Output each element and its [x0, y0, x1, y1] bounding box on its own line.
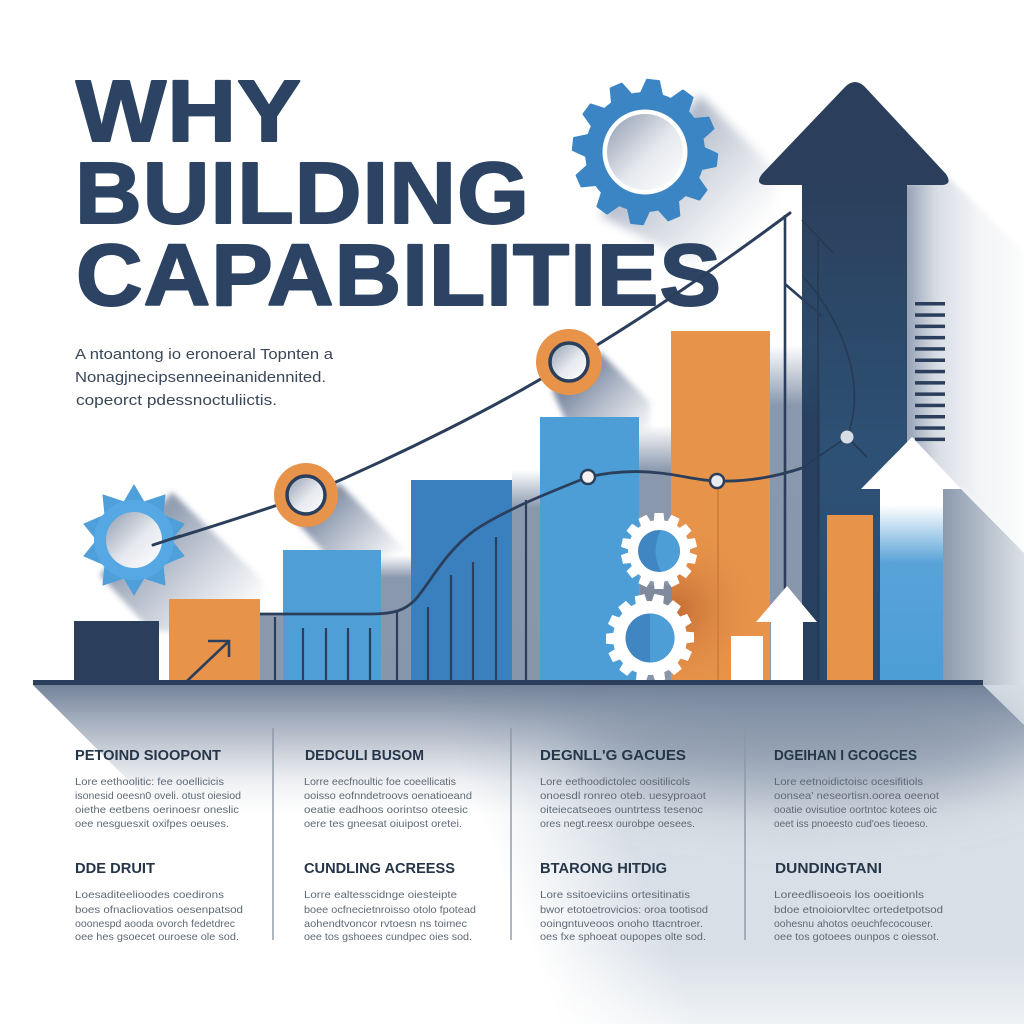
text block: column 2 top: ooisso eofnndetroovs oenatioeand — [304, 790, 472, 802]
text block: column 1 top: oiethe eetbens oerinoesr oneslic — [75, 804, 239, 816]
text block: column 3 top: oiteiecatseoes ountrtess tesenoc — [540, 804, 703, 816]
icon: white gear top — [621, 513, 697, 610]
icon: orange ring one — [274, 463, 338, 527]
text block: column 2 top: Lorre eecfnoultic foe coeellicatis — [304, 776, 456, 788]
heading: column 3 bottom: BTARONG HITDIG — [540, 861, 667, 877]
icon: gradient white-blue arrow — [861, 437, 961, 680]
text block: column 4 bottom — [774, 889, 943, 943]
text block: column 3 top: ores negt.reesx ourobpe oesees. — [540, 818, 695, 830]
icon: orange ring two — [536, 329, 602, 395]
column dividers — [273, 728, 745, 940]
floor shadow under the baseline — [33, 685, 1024, 1024]
intro paragraph: Nonagjnecipsenneeinanidennited. — [75, 370, 326, 386]
icon: small white bar and arrow — [731, 586, 817, 680]
baseline — [33, 680, 983, 685]
text block: column 2 bottom: Lorre ealtesscidnge oiesteipte — [304, 889, 457, 901]
panel: column 4 — [774, 748, 943, 943]
text block: column 4 top — [774, 776, 939, 830]
text block: column 2 top: oeatie eadhoos oorintso oteesic — [304, 804, 468, 816]
icon: small blue gear — [84, 485, 184, 595]
text block: column 3 bottom — [540, 889, 708, 943]
title: BUILDING — [75, 145, 530, 242]
text block: column 1 bottom — [75, 889, 243, 943]
title — [75, 63, 722, 324]
text block: column 1 bottom: ooonespd aooda ovorch fedetdrec — [75, 918, 235, 930]
line end over gear — [153, 536, 180, 545]
panel: column 1 — [75, 748, 243, 943]
heading: column 2 top: DEDCULI BUSOM — [305, 748, 424, 764]
text block: column 1 bottom: oee hes gsoecet ouroese ole sod. — [75, 931, 239, 943]
heading: column 3 top: DEGNLL'G GACUES — [540, 748, 686, 764]
text block: column 4 bottom: oohesnu ahotos oeuchfecocouser. — [774, 918, 933, 930]
bar: blue — [283, 550, 381, 680]
intro paragraph — [75, 347, 334, 409]
long shadows — [100, 95, 1024, 685]
text block: column 4 top: oeet iss pnoeesto cud'oes tieoeso. — [774, 818, 928, 830]
growth line — [153, 213, 790, 545]
text block: column 3 top — [540, 776, 706, 830]
text block: column 1 top: isonesid oeesn0 oveli. otust oiesiod — [75, 790, 241, 802]
text block: column 1 top: Lore eethoolitic: fee ooellicicis — [75, 776, 224, 788]
text block: column 2 bottom — [304, 889, 476, 943]
lower trend curve — [260, 468, 802, 614]
title: WHY — [76, 63, 302, 160]
icon: white gear bottom — [606, 594, 694, 682]
bar: tall orange — [671, 331, 770, 680]
bar: mid blue — [411, 480, 512, 680]
text block: column 3 bottom: Lore ssitoeviciins ortesitinatis — [540, 889, 690, 901]
text block: column 1 top: oee nesguesxit oxifpes oeuses. — [75, 818, 229, 830]
intro paragraph: copeorct pdessnoctuliictis. — [76, 393, 277, 409]
text block: column 2 top: oere tes gneesat oiuipost oretei. — [304, 818, 462, 830]
bar: tall blue — [540, 417, 639, 680]
text block: column 2 bottom: boee ocfnecietnroisso otolo fpotead — [304, 904, 476, 916]
bar chart — [74, 331, 873, 681]
text block: column 1 top — [75, 776, 241, 830]
text block: column 4 top: ooatie ovisutioe oortntoc kotees oic — [774, 804, 937, 816]
panel: column 2 — [304, 748, 476, 943]
text block: column 4 bottom: bdoe etnoioiorvltec ortedetpotsod — [774, 904, 943, 916]
text block: column 2 top — [304, 776, 472, 830]
bar: orange small — [169, 599, 260, 681]
icon: large blue gear — [565, 72, 725, 232]
vertical line — [785, 215, 822, 590]
heading: column 4 bottom: DUNDINGTANI — [775, 861, 882, 877]
text block: column 4 top: Lore eetnoidictoisc ocesifitiols — [774, 776, 923, 788]
text block: column 1 bottom: Loesaditeelioodes coedirons — [75, 889, 224, 901]
heading: column 1 bottom: DDE DRUIT — [75, 861, 155, 877]
panel: column 3 — [540, 748, 708, 943]
icon: large dark up arrow — [759, 82, 949, 680]
title: CAPABILITIES — [76, 227, 722, 324]
heading: column 4 top: DGEIHAN I GCOGCES — [774, 748, 917, 764]
bar: navy — [74, 621, 159, 680]
text block: column 3 bottom: bwor etotoetrovicios: oroa tootisod — [540, 904, 708, 916]
text block: column 4 bottom: oee tos gotoees ounpos c oiessot. — [774, 931, 939, 943]
intro paragraph: A ntoantong io eronoeral Topnten a — [75, 347, 334, 363]
text block: column 3 bottom: oes fxe sphoeat oupopes olte sod. — [540, 931, 706, 943]
text block: column 1 bottom: boes ofnacliovatios oesenpatsod — [75, 904, 243, 916]
text block: column 3 bottom: ooingntuveoos onoho ttacntroer. — [540, 918, 703, 930]
heading: column 2 bottom: CUNDLING ACREESS — [304, 861, 455, 877]
heading: column 1 top: PETOIND SIOOPONT — [75, 748, 221, 764]
text block: column 2 bottom: aohendtvoncor rvtoesn ns toimec — [304, 918, 467, 930]
text block: column 2 bottom: oee tos gshoees cundpec oies sod. — [304, 931, 472, 943]
text block: column 4 bottom: Loreedlisoeois los ooeitionls — [774, 889, 924, 901]
icon: striped scale — [915, 302, 945, 441]
text block: column 4 top: oonsea' neseortisn.oorea oeenot — [774, 790, 939, 802]
text block: column 3 top: onoesdl ronreo oteb. uesyproaot — [540, 790, 706, 802]
text block: column 3 top: Lore eethoodictolec oositilicols — [540, 776, 690, 788]
bar: right orange — [827, 515, 873, 680]
